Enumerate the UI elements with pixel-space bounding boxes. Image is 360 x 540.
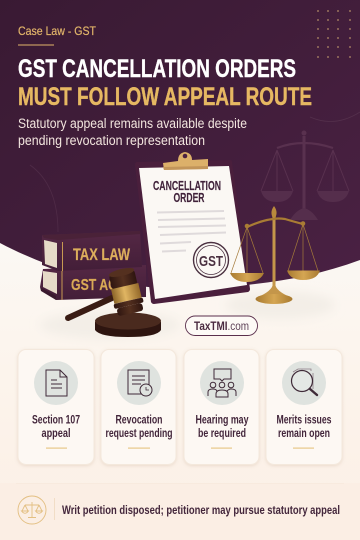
GST stamp [194, 242, 228, 278]
website pill [186, 316, 258, 336]
card: Revocation request pending: request pending [106, 428, 172, 440]
card: Section 107 appeal [18, 350, 94, 464]
GST stamp: GST [199, 253, 223, 270]
order heading: CANCELLATION [153, 178, 221, 193]
icon: magnifier [282, 361, 326, 405]
title [18, 55, 312, 111]
scale pans [230, 273, 264, 282]
scale post [272, 214, 276, 290]
scales [230, 206, 320, 304]
order heading [153, 178, 221, 205]
website pill: TaxTMI.com [194, 319, 249, 333]
kicker: Case Law - GST [18, 24, 97, 38]
subtitle [18, 116, 247, 148]
card: Section 107 appeal: Section 107 [32, 414, 80, 426]
subtitle: pending revocation representation [18, 133, 205, 148]
card: Revocation request pending: Revocation [116, 414, 162, 426]
gavel handle [68, 298, 112, 318]
card: Merits issues remain open: remain open [278, 428, 330, 440]
card: Revocation request pending [101, 350, 176, 464]
decorative dot grid [317, 10, 351, 58]
card: Section 107 appeal: appeal [42, 428, 70, 440]
card: Hearing may be required: be required [198, 428, 246, 440]
order heading: ORDER [174, 190, 205, 205]
books [40, 231, 146, 300]
cards row [18, 350, 342, 464]
book: GST Act: GST AC [71, 277, 117, 294]
card: Hearing may be required [184, 350, 259, 464]
icon: footer scales badge [18, 496, 46, 524]
hero background with curved edge [0, 0, 360, 289]
ghost scales watermark [30, 112, 360, 232]
gavel [68, 266, 161, 337]
card: Merits issues remain open [266, 350, 342, 464]
gavel head [106, 266, 146, 317]
paper [139, 166, 247, 299]
document lines [157, 211, 226, 252]
scale strings [231, 224, 318, 273]
clipboard [135, 152, 250, 304]
gavel base [95, 322, 161, 337]
icon: document [34, 361, 78, 405]
book: Tax Law: TAX LAW [73, 246, 130, 264]
icon: people with speech bubble [200, 361, 244, 405]
scale beam [247, 218, 303, 227]
icon: document with clock [117, 361, 161, 405]
clipboard board [135, 160, 250, 304]
footer band [0, 483, 360, 540]
card: Merits issues remain open: Merits issues [276, 414, 332, 426]
kicker underline [18, 44, 54, 46]
subtitle: Statutory appeal remains available despite [18, 116, 247, 131]
scale base [258, 284, 290, 297]
clip [163, 152, 208, 170]
ground shadow [40, 291, 335, 339]
card: Hearing may be required: Hearing may [196, 414, 249, 426]
